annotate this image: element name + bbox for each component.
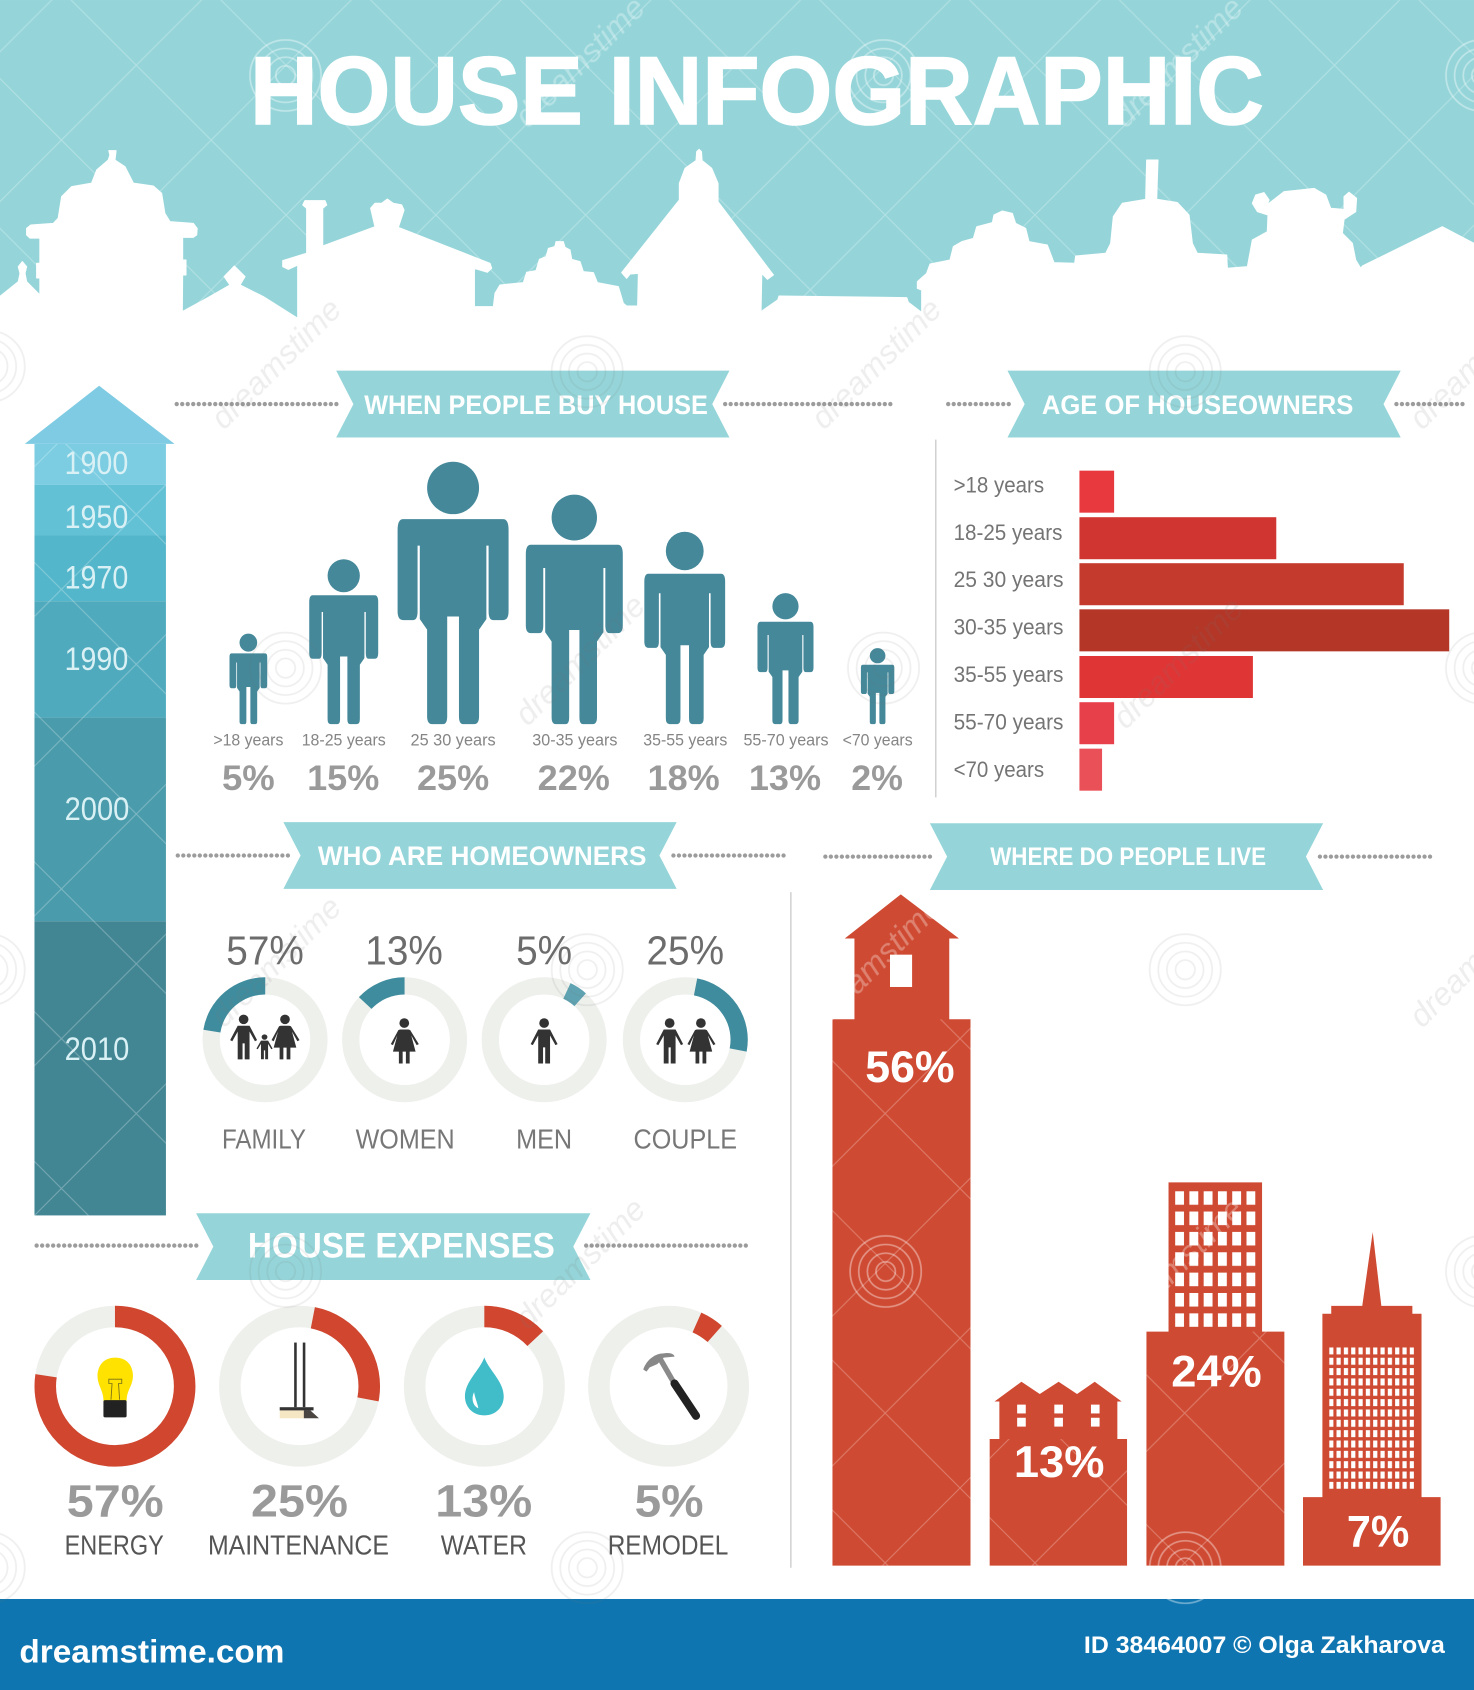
ring: energy 57%: ENERGY (65, 1529, 164, 1560)
panel: year arrow timeline: 1970 (65, 559, 128, 595)
age labels: 35-55 years (643, 731, 727, 750)
footer bar: dreamstime.com (19, 1634, 284, 1670)
bar chart: age of houseowners: >18 years (954, 472, 1044, 497)
icon: hammer (643, 1353, 696, 1416)
bar chart: age of houseowners: 35-55 years (954, 662, 1063, 687)
text: dreamstime (804, 291, 949, 436)
bar chart: age of houseowners (936, 440, 1449, 797)
age labels: 18-25 years (302, 731, 386, 750)
ring: energy 57% (45, 1316, 185, 1560)
ring: women 13% (328, 927, 481, 1155)
text: dreamstime (507, 1191, 652, 1336)
panel: house expenses rings (45, 1294, 761, 1560)
heading: where do people live (825, 823, 1431, 890)
percent values: 22% (538, 758, 610, 798)
age labels (213, 731, 913, 750)
text: dreamstime (507, 587, 652, 732)
panel: where do people live buildings (791, 892, 1441, 1568)
heading: when people buy house (177, 371, 892, 437)
heading: age of houseowners: AGE OF HOUSEOWNERS (1042, 390, 1353, 420)
heading: who are homeowners: WHO ARE HOMEOWNERS (318, 841, 646, 871)
panel: year arrow timeline: 1990 (65, 641, 128, 677)
percent values: 5% (222, 758, 275, 798)
text: dreamstime (804, 889, 949, 1034)
ring: water 13%: WATER (441, 1529, 527, 1560)
text: dreamstime (204, 889, 348, 1034)
footer bar (0, 1599, 1474, 1690)
ring: remodel 5%: REMODEL (608, 1529, 728, 1560)
panel: year arrow timeline: 1950 (65, 499, 128, 535)
heading: age of houseowners (948, 371, 1463, 437)
age labels: 25 30 years (411, 731, 496, 750)
ring: men 5% (473, 927, 616, 1155)
bar chart: age of houseowners: <70 years (954, 757, 1044, 782)
panel: year arrow timeline: 1900 (65, 445, 128, 481)
heading: where do people live: WHERE DO PEOPLE LIVE (990, 844, 1266, 871)
icon: water drop (465, 1357, 504, 1415)
figures row (230, 462, 894, 724)
ring: men 5%: MEN (516, 1124, 572, 1155)
text: dreamstime (204, 291, 348, 436)
ring: men 5%: 5% (516, 927, 572, 973)
age labels: 55-70 years (743, 731, 829, 750)
percent values: 2% (851, 758, 903, 798)
panel: when people buy house figures (213, 462, 913, 798)
ring: couple 25%: 25% (646, 927, 724, 973)
title: HOUSE INFOGRAPHIC (250, 36, 1264, 145)
icon: broom (280, 1343, 319, 1418)
percent values: 25% (417, 758, 489, 798)
ring: couple 25% (622, 927, 748, 1155)
ring: couple 25%: COUPLE (634, 1124, 737, 1155)
bar chart: age of houseowners: 18-25 years (954, 520, 1062, 545)
header background with skyline (0, 0, 1474, 366)
panel: year arrow timeline: 2000 (65, 791, 129, 827)
ring: family 57%: FAMILY (222, 1124, 306, 1155)
building: house tower 56%: 56% (865, 1043, 955, 1092)
ring: women 13%: WOMEN (356, 1124, 455, 1155)
ring: water 13%: 13% (435, 1476, 532, 1527)
building: row houses 13%: 13% (1014, 1438, 1104, 1487)
building: spire skyscraper 7%: 7% (1347, 1508, 1409, 1557)
building: office tower 24% (1146, 1182, 1284, 1566)
heading: who are homeowners (178, 822, 784, 889)
percent values: 15% (307, 758, 379, 798)
percent values: 13% (749, 758, 821, 798)
ring: energy 57%: 57% (67, 1476, 164, 1527)
panel: year arrow timeline: 2010 (65, 1031, 129, 1067)
age labels: 30-35 years (532, 731, 617, 750)
ring: family 57%: 57% (226, 927, 304, 973)
panel: who are homeowners rings (203, 927, 748, 1155)
skyline silhouette (0, 149, 1474, 366)
age labels: >18 years (213, 731, 283, 750)
ring: women 13%: 13% (365, 927, 443, 973)
percent values (222, 758, 903, 798)
heading: when people buy house: WHEN PEOPLE BUY HOUSE (364, 390, 708, 420)
footer bar: ID 38464007 © Olga Zakharova (1084, 1633, 1446, 1659)
ring: remodel 5%: 5% (635, 1476, 704, 1527)
icon: light bulb (98, 1358, 133, 1417)
building: row houses 13% (990, 1382, 1127, 1566)
heading: house expenses (37, 1213, 751, 1280)
age labels: <70 years (843, 731, 913, 750)
building: house tower 56% (832, 894, 970, 1566)
text: dreamstime (1105, 1191, 1250, 1336)
bar chart: age of houseowners: 30-35 years (954, 615, 1063, 640)
ring: water 13% (415, 1316, 554, 1560)
building: spire skyscraper 7% (1303, 1232, 1441, 1566)
bar chart: age of houseowners: 25 30 years (954, 567, 1063, 592)
ring: maintenance 25%: 25% (251, 1476, 348, 1527)
ring: family 57% (203, 927, 327, 1155)
panel: year arrow timeline (25, 386, 175, 1215)
building: office tower 24%: 24% (1171, 1348, 1262, 1397)
percent values: 18% (648, 758, 720, 798)
ring: maintenance 25%: MAINTENANCE (208, 1529, 389, 1560)
bar chart: age of houseowners: 55-70 years (954, 709, 1063, 734)
heading: house expenses: HOUSE EXPENSES (248, 1225, 555, 1265)
ring: maintenance 25% (208, 1304, 389, 1560)
ring: remodel 5% (577, 1294, 761, 1560)
text: dreamstime (1105, 591, 1250, 735)
